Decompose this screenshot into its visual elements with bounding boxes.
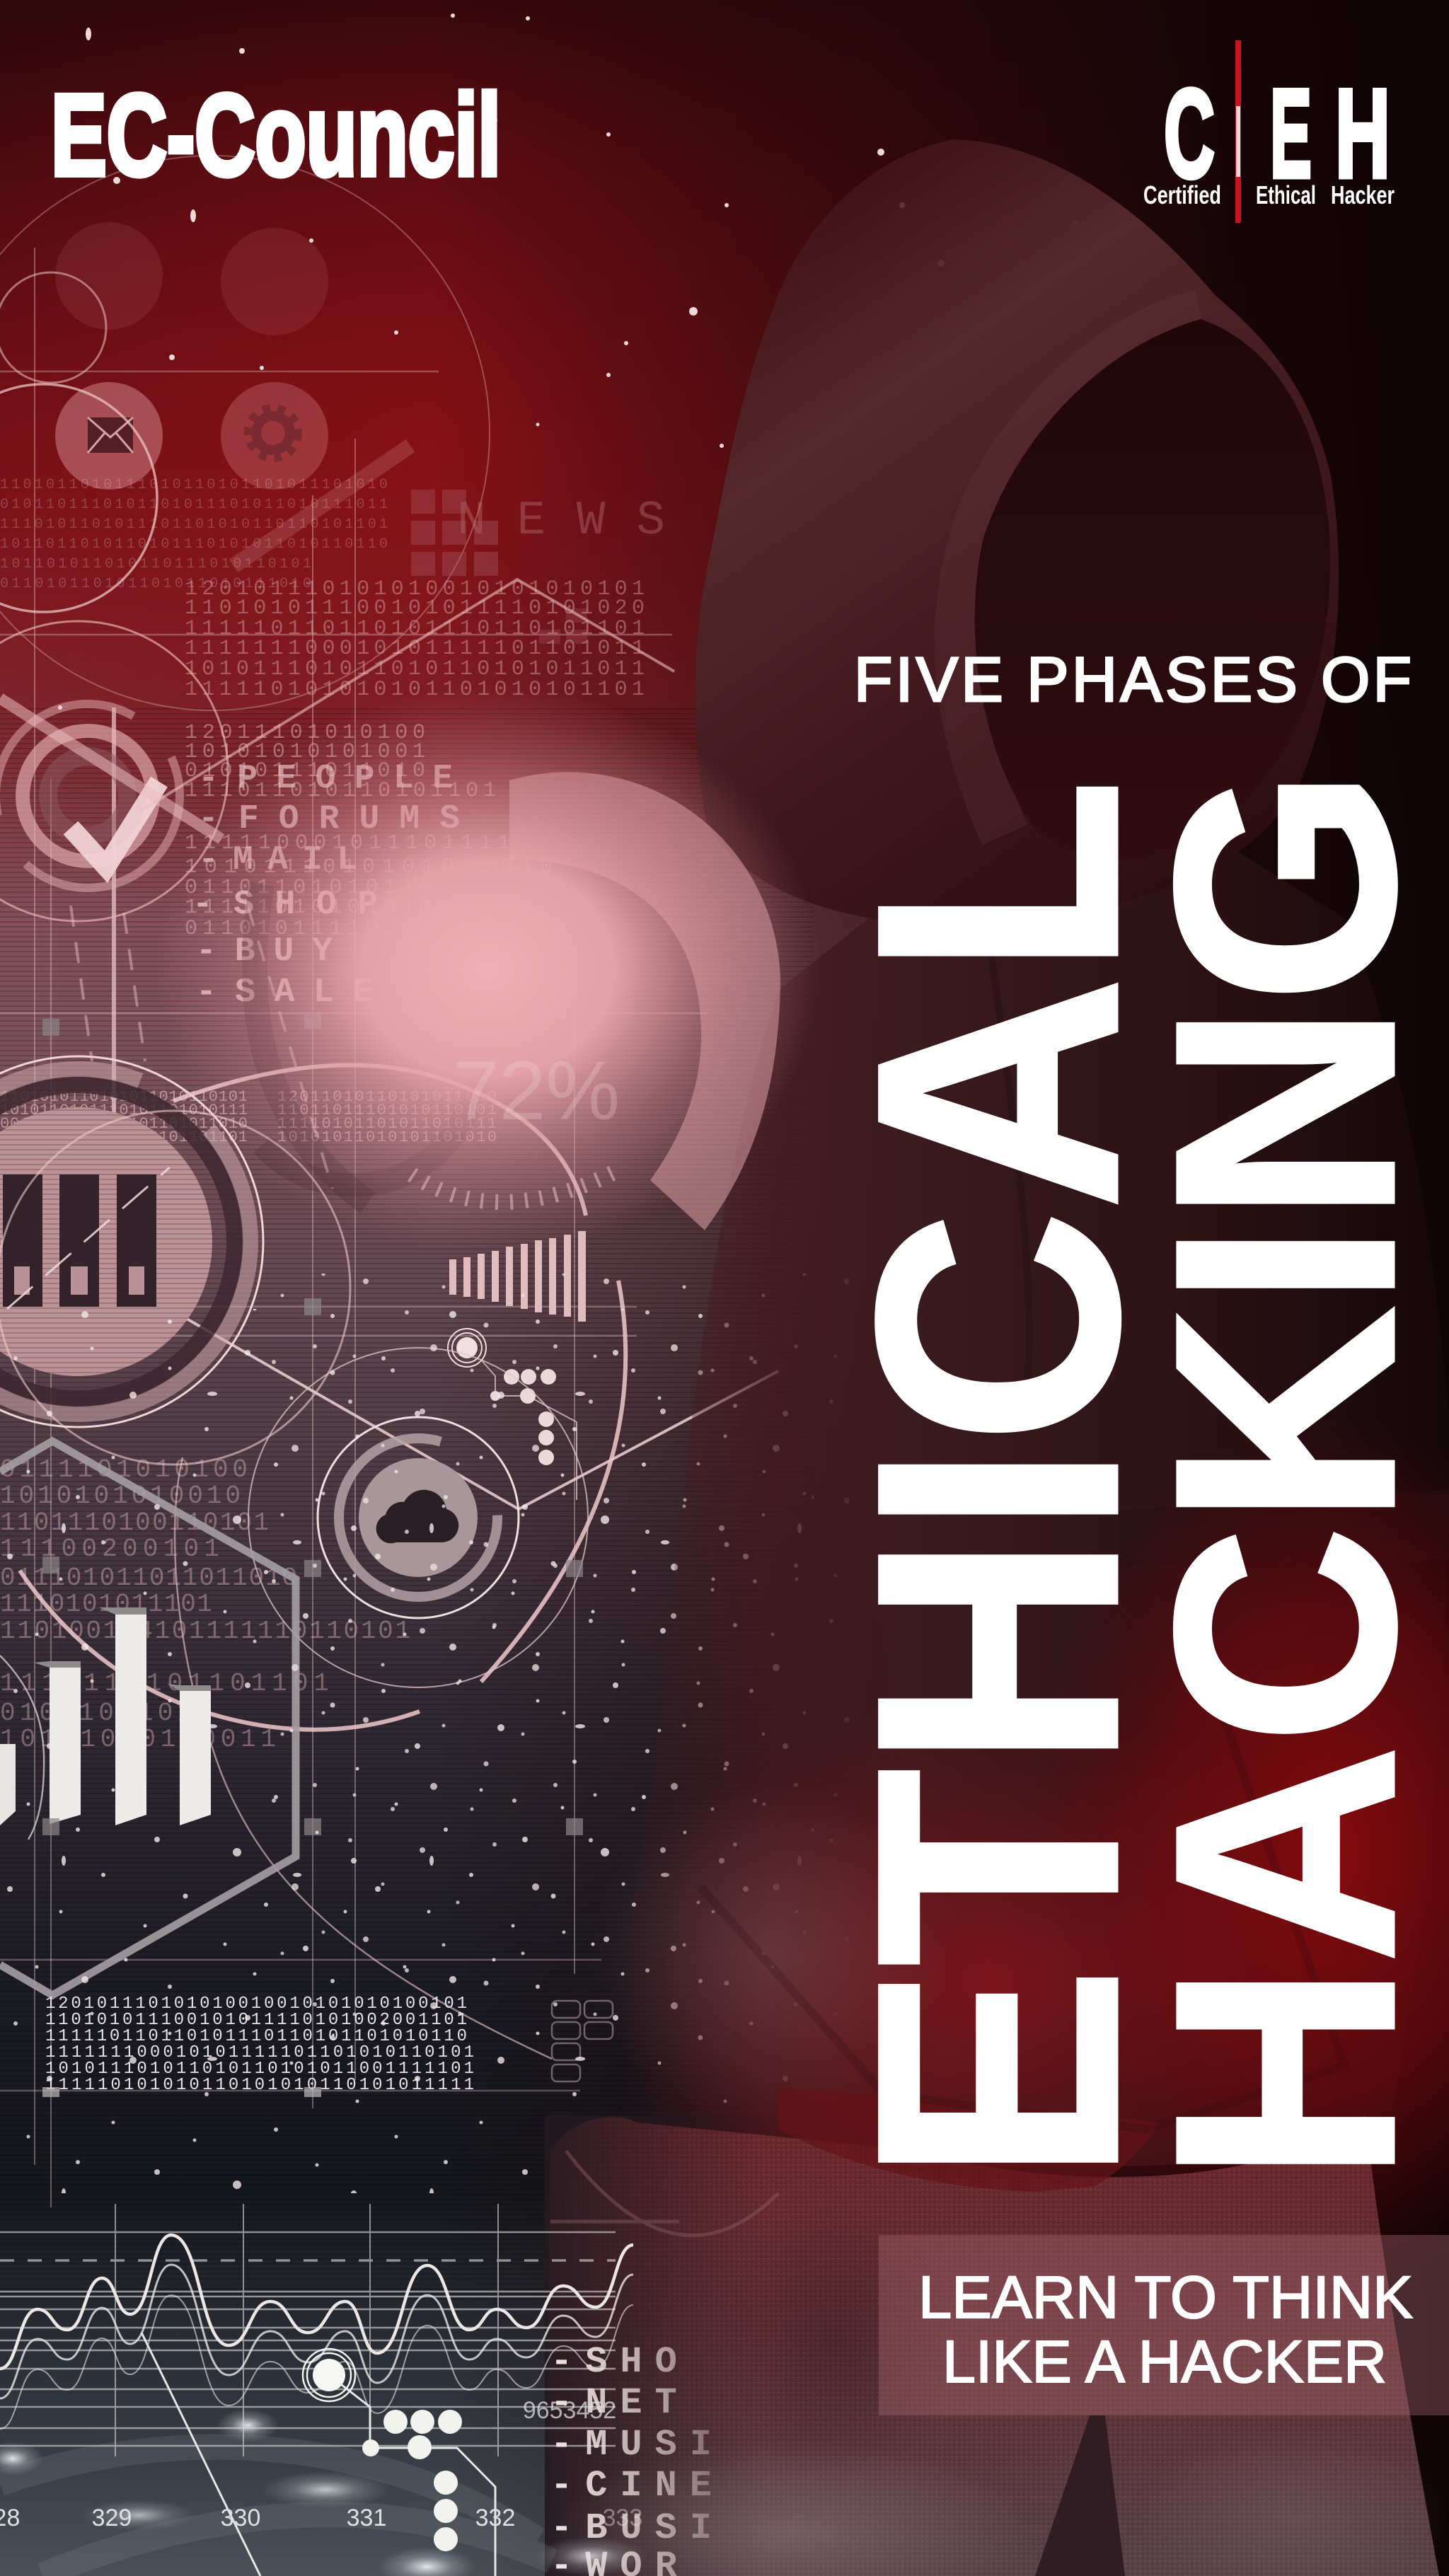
binary data rows upper: 1010110101110101101010111 — [0, 1102, 248, 1119]
binary data rows upper: 1010111010101011010 — [185, 855, 553, 879]
tagline text: LIKE A HACKER — [942, 2328, 1387, 2395]
pink light flare — [156, 686, 821, 1252]
menu list PEOPLE FORUMS MAIL SHOP BUY SALE: -PEOPLE — [198, 760, 453, 798]
red torso highlight — [1033, 1415, 1449, 2292]
hood outer — [695, 139, 1339, 926]
icon: envelope — [88, 417, 133, 453]
binary data rows upper: 011101011011011010 — [0, 1564, 297, 1593]
dusty sleeve light — [587, 1783, 955, 2122]
wave lines — [0, 2235, 633, 2429]
menu list PEOPLE FORUMS MAIL SHOP BUY SALE: -BUY — [196, 932, 333, 971]
binary data rows lower: 101011101011010110101011001111101 — [45, 2060, 474, 2079]
icon: cloud — [376, 1490, 458, 1543]
laptop band — [1118, 1489, 1449, 1567]
binary data rows upper: 11011011101010110101 — [277, 1102, 497, 1119]
hood fold band — [959, 314, 1201, 835]
menu list PEOPLE FORUMS MAIL SHOP BUY SALE — [192, 760, 460, 1012]
jeans — [545, 2087, 1449, 2576]
logo: CEH Certified Ethical Hacker: Certified — [1143, 180, 1221, 209]
binary data rows upper: 011010110101101011010111010 — [0, 576, 311, 592]
thin orbit circles top left — [0, 156, 490, 710]
axis numbers: 330 — [221, 2505, 260, 2531]
binary data rows lower: 111111100010101111101101010110101 — [45, 2043, 474, 2062]
menu list PEOPLE FORUMS MAIL SHOP BUY SALE: -MAIL — [198, 841, 357, 879]
speck field — [0, 1309, 814, 2193]
binary data rows upper: 1011011010110101110101011010110110 — [0, 536, 388, 553]
hoodie pocket — [700, 1698, 1344, 2130]
heading: five phases of: FIVE PHASES OF — [854, 644, 1412, 715]
bottom chart panel — [0, 2204, 724, 2576]
logo: CEH Certified Ethical Hacker: C — [1164, 63, 1215, 204]
menu list SHOP NET MUSIC CINEMA BUSINESS WORLD: -NET — [550, 2382, 690, 2424]
faded NEWS block: NEWS — [457, 494, 665, 548]
axis numbers: 332 — [475, 2505, 515, 2531]
gauge bars — [449, 1231, 586, 1322]
binary data rows upper: 1110110101101101 — [0, 1669, 329, 1698]
panel: left technology graphics — [0, 13, 1078, 2299]
binary data rows upper: 01101011110101 — [185, 917, 432, 941]
faded NEWS block — [411, 490, 665, 644]
binary data rows upper: 111111100010101111101101011 — [185, 637, 645, 661]
thin orbit over chart — [0, 1656, 44, 1839]
dial arcs behind glow — [230, 884, 478, 1203]
binary data rows lower — [45, 1994, 474, 2095]
binary data rows upper: 11100200101 — [0, 1535, 219, 1564]
menu list SHOP NET MUSIC CINEMA BUSINESS WORLD: -SHO — [550, 2341, 690, 2383]
tagline text — [918, 2264, 1413, 2395]
cloud circle — [248, 1348, 588, 1687]
binary data rows upper: 11110101101011010111 — [277, 1115, 497, 1133]
binary data rows lower: 120101110101010010010101010100101 — [45, 1994, 467, 2014]
dense speck cluster — [269, 1273, 849, 2016]
tagline text: LEARN TO THINK — [918, 2264, 1413, 2330]
logo: EC-Council: EC-Council — [51, 70, 501, 200]
orbit arcs — [0, 906, 625, 2059]
binary data rows upper: 1101010110101011010110101 — [0, 1088, 248, 1106]
binary data rows upper: 1101110100110101 — [0, 1508, 269, 1537]
binary data rows lower: 110101011100101011110101002001101 — [45, 2011, 467, 2030]
binary data rows upper: 111110101010101101010101101 — [185, 678, 645, 702]
large circle with bar chart icon — [0, 1056, 263, 1427]
pink light flare: 72% — [453, 1044, 620, 1138]
binary data rows upper: 0101101110101101011101011010111011 — [0, 497, 388, 513]
binary data rows upper: 1110101101011101101010110110101101 — [0, 516, 388, 533]
menu list PEOPLE FORUMS MAIL SHOP BUY SALE: -SALE — [196, 974, 373, 1012]
binary data rows upper: 10101010110011 — [0, 1725, 276, 1754]
scan lines texture — [0, 707, 814, 2299]
chevron lines — [0, 446, 778, 1509]
target rings with check mark — [0, 621, 228, 921]
menu list SHOP NET MUSIC CINEMA BUSINESS WORLD — [550, 2341, 724, 2576]
horizontal chart rules — [0, 2204, 616, 2456]
radial tick marks — [412, 1172, 616, 1202]
zipper — [987, 920, 1029, 1401]
binary data rows upper: 10101011010101101010 — [277, 1128, 497, 1146]
logo: CEH Certified Ethical Hacker — [1143, 40, 1395, 223]
binary data rows upper: 101011101011010110101011011 — [185, 657, 645, 681]
binary data rows upper: 12011101010100 — [185, 721, 425, 745]
binary data rows upper: 110100114101111110110101 — [0, 1617, 410, 1646]
binary data rows upper: 101101011010110111010110101 — [0, 556, 311, 572]
circuit path with nodes — [142, 2333, 495, 2576]
menu list SHOP NET MUSIC CINEMA BUSINESS WORLD: -BUSI — [550, 2507, 724, 2549]
menu list SHOP NET MUSIC CINEMA BUSINESS WORLD: -CINE — [550, 2465, 724, 2507]
binary data rows upper: 01011011011 — [0, 1699, 212, 1728]
menu list PEOPLE FORUMS MAIL SHOP BUY SALE: -SHOP — [192, 886, 378, 924]
rounded square grid — [552, 2001, 613, 2081]
logo: CEH Certified Ethical Hacker: Ethical — [1256, 180, 1316, 209]
guide grid lines — [0, 248, 708, 2207]
binary data rows upper: 111110110110101110110101101 — [185, 617, 645, 641]
axis numbers: 331 — [347, 2505, 386, 2531]
axis numbers — [0, 2397, 642, 2531]
binary data rows upper: 10101010101001 — [185, 740, 425, 764]
binary data rows upper: 1110101011101 — [0, 1590, 212, 1619]
heading: ETHICAL vertical: ETHICAL — [805, 778, 1189, 2183]
binary data rows upper: 1101011010111010110101101011101010 — [0, 477, 388, 493]
connector squares — [42, 1012, 583, 2097]
menu list PEOPLE FORUMS MAIL SHOP BUY SALE: -FORUMS — [198, 800, 460, 838]
binary data rows upper: 1011101011010110101101101 — [0, 1128, 248, 1146]
light streaks — [0, 2408, 647, 2576]
binary data rows lower: 111110101010110101010110101011111 — [45, 2076, 474, 2095]
icon: check mark — [71, 782, 159, 867]
axis numbers: 333 — [603, 2505, 642, 2531]
bar chart icon — [3, 1174, 156, 1307]
logo: CEH Certified Ethical Hacker: E — [1270, 63, 1312, 204]
white 3D bar chart — [0, 1607, 211, 1825]
hexagon frame — [0, 1441, 296, 1995]
icon: gear — [248, 408, 299, 458]
menu list SHOP NET MUSIC CINEMA BUSINESS WORLD: -MUSI — [550, 2424, 724, 2466]
tagline panel — [879, 2235, 1449, 2415]
figure: hooded hacker — [545, 139, 1449, 2576]
binary data rows upper: 110101011100101011110101020 — [185, 596, 645, 620]
binary data rows upper — [0, 477, 645, 1754]
logo: CEH Certified Ethical Hacker: H — [1335, 63, 1390, 204]
face shadow — [975, 319, 1330, 859]
binary data rows upper: 1010101010010 — [0, 1482, 241, 1511]
axis numbers: 9653452 — [523, 2397, 616, 2424]
binary data rows upper: 11111010101010 — [185, 896, 432, 920]
binary data rows lower: 111110110110101110110101101010110 — [45, 2027, 467, 2046]
binary data rows upper: 0111101010100 — [0, 1455, 248, 1484]
binary data rows upper: 0010110111010101101011010 — [0, 1115, 248, 1133]
binary data rows upper: 01101101010110 — [185, 876, 432, 900]
binary data rows upper: 120101110101010010101010101 — [185, 577, 645, 601]
axis numbers: 329 — [92, 2505, 132, 2531]
hacker torso and hoodie — [594, 838, 1449, 2166]
social icon circles — [55, 222, 328, 490]
top stars — [58, 13, 1078, 710]
binary data rows upper: 111011010110101101 — [185, 779, 496, 803]
binary data rows upper: 12011010110101011010 — [277, 1088, 497, 1106]
binary data rows upper: 111110001011101111 — [185, 831, 510, 855]
circuit nodes — [448, 1329, 577, 1500]
logo: CEH Certified Ethical Hacker: Hacker — [1331, 180, 1395, 209]
binary data rows upper: 01010111011010 — [185, 759, 425, 783]
